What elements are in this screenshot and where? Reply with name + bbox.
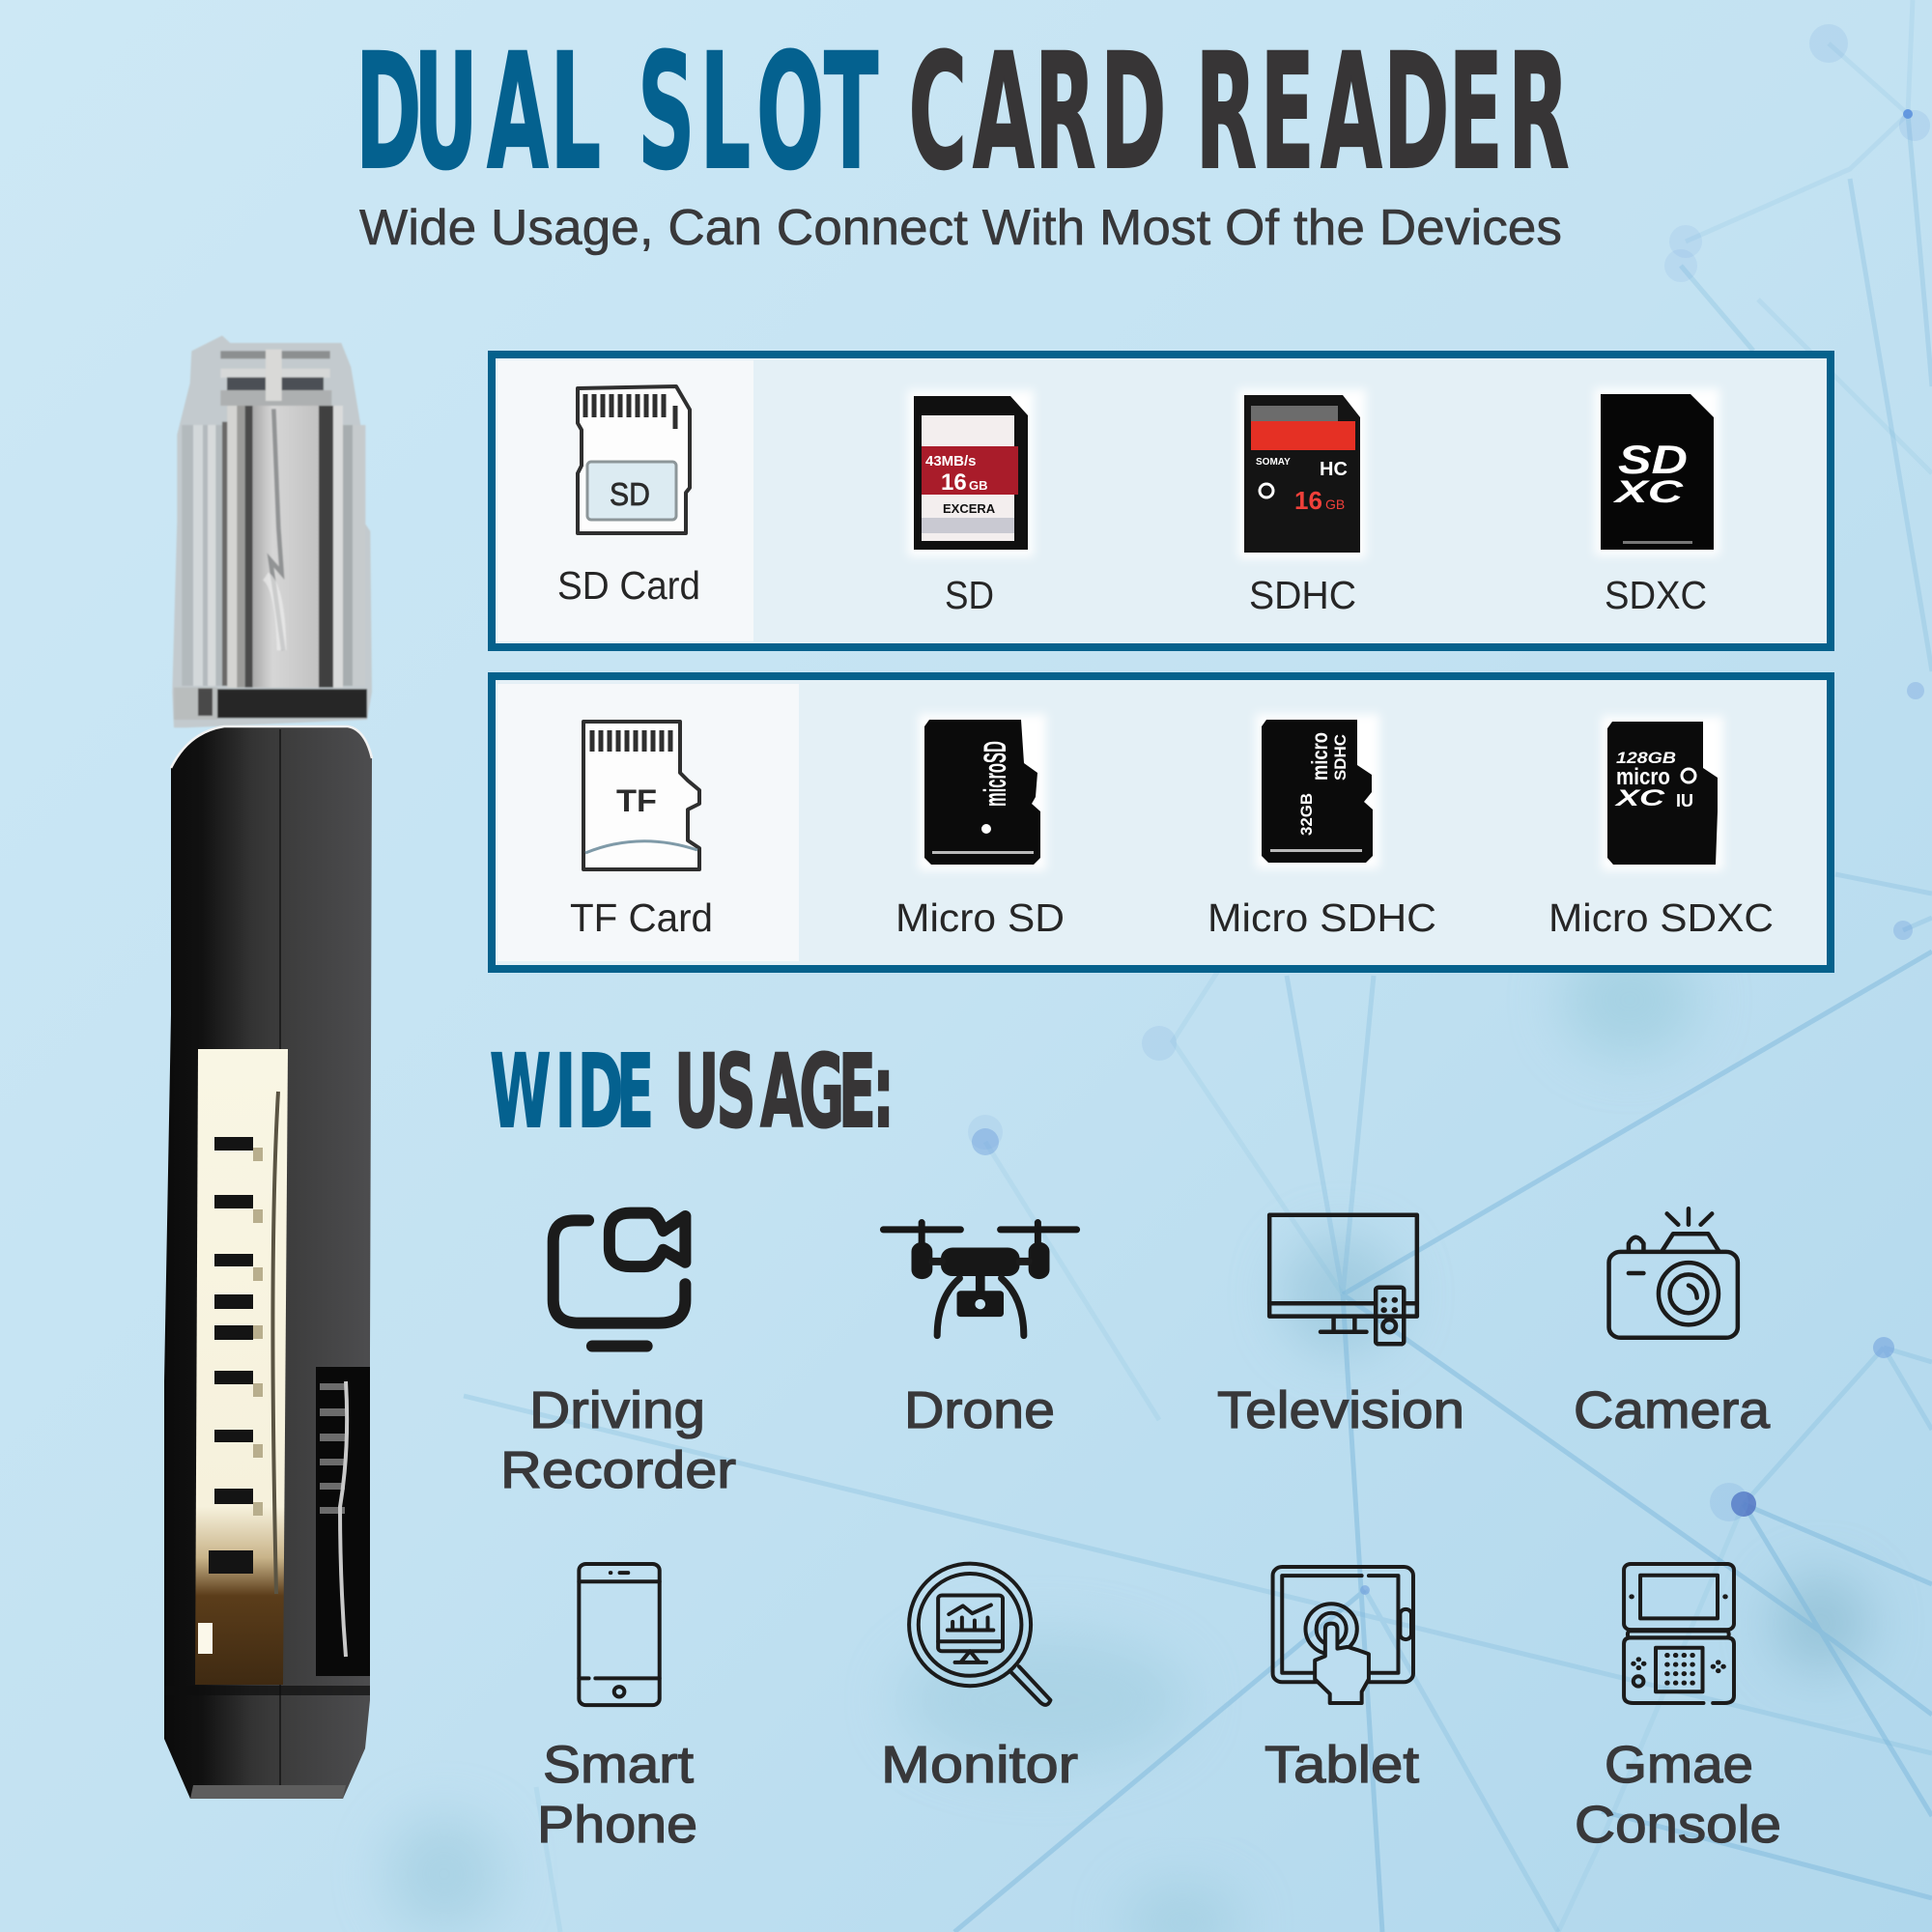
card: SD: 16	[941, 469, 967, 496]
card: SDHC: HC	[1320, 459, 1348, 480]
icon: television	[1269, 1215, 1417, 1344]
title	[355, 19, 1570, 205]
label: Micro SDHC: Micro SDHC	[1208, 895, 1436, 940]
card: SD	[908, 390, 1034, 556]
card: Micro SD	[919, 714, 1046, 870]
label: smart phone: Smart	[543, 1736, 694, 1794]
card: Micro SDHC: 32GB	[1297, 793, 1316, 836]
card: Micro SD: microSD	[978, 741, 1012, 807]
card: SD: EXCERA	[943, 501, 996, 516]
card: SDHC: SOMAY	[1256, 457, 1291, 468]
label: SDHC: SDHC	[1249, 573, 1356, 617]
card: SDXC: XC	[1612, 474, 1684, 509]
label: SD Card	[557, 563, 700, 608]
title: READER	[1196, 19, 1570, 205]
card: Micro SDXC: XC	[1613, 785, 1665, 811]
card: SDXC: SD	[1618, 437, 1688, 482]
label: monitor: Monitor	[881, 1736, 1078, 1794]
icon: TF card outline: TF	[616, 783, 657, 818]
label: smart phone	[537, 1736, 697, 1854]
card: SD: GB	[969, 478, 987, 493]
icon: camera	[1609, 1208, 1738, 1338]
card: SDXC	[1595, 388, 1719, 555]
label: driving recorder: Driving	[529, 1381, 705, 1439]
label: game console: Gmae	[1605, 1736, 1753, 1794]
label: TF Card	[570, 895, 713, 940]
label: driving recorder	[500, 1381, 736, 1499]
card: Micro SDXC: 128GB	[1616, 749, 1676, 767]
memory card slot	[195, 1049, 288, 1685]
clear cap	[172, 335, 372, 727]
icon: tablet	[1273, 1567, 1413, 1703]
label: SD: SD	[945, 573, 994, 617]
card: SD: 43MB/s	[925, 453, 977, 469]
icon: SD card outline	[578, 386, 690, 533]
product photo: card reader	[164, 335, 372, 1799]
icon: smart phone	[579, 1564, 660, 1705]
label: camera: Camera	[1574, 1381, 1771, 1439]
card: Micro SDXC: micro	[1616, 764, 1670, 790]
icon: monitor	[909, 1564, 1050, 1705]
SD card cell	[497, 360, 753, 641]
card: SDHC: 16	[1294, 486, 1322, 515]
heading: wide usage: USAGE:	[674, 1033, 895, 1151]
label: driving recorder: Recorder	[500, 1441, 736, 1499]
icon: TF card outline	[583, 722, 699, 869]
label: Micro SDXC: Micro SDXC	[1548, 895, 1774, 940]
label: Micro SD: Micro SD	[895, 895, 1065, 940]
panel: SD card types	[492, 355, 1831, 647]
card: Micro SDHC: SDHC	[1331, 734, 1350, 781]
title: CARD	[908, 19, 1166, 205]
panel: TF card types	[492, 676, 1831, 969]
label: game console: Console	[1575, 1796, 1781, 1854]
card: Micro SDXC: IU	[1676, 791, 1693, 810]
card: SDHC: GB	[1325, 497, 1345, 512]
icon: SD card outline: SD	[610, 476, 650, 512]
TF card cell	[497, 684, 799, 961]
title: SLOT	[638, 19, 878, 205]
label: tablet: Tablet	[1264, 1736, 1419, 1794]
subtitle: Wide Usage, Can Connect With Most Of the Devices	[359, 200, 1562, 256]
card: Micro SDXC	[1602, 716, 1723, 870]
heading: wide usage	[490, 1033, 895, 1151]
label: drone: Drone	[904, 1381, 1055, 1439]
label: smart phone: Phone	[537, 1796, 697, 1854]
icon: driving recorder	[554, 1213, 685, 1346]
card: SDHC	[1238, 389, 1366, 558]
icon: game console	[1624, 1564, 1734, 1703]
label: SDXC: SDXC	[1605, 573, 1707, 617]
heading: wide usage: WIDE	[490, 1033, 654, 1151]
micro card slot	[316, 1367, 370, 1676]
card: Micro SDHC: micro	[1307, 732, 1332, 781]
card: Micro SDHC	[1256, 714, 1379, 868]
title: DUAL	[355, 19, 601, 205]
black body	[164, 726, 372, 1799]
label: game console	[1575, 1736, 1781, 1854]
label: television: Television	[1217, 1381, 1464, 1439]
icon: drone	[883, 1223, 1077, 1336]
